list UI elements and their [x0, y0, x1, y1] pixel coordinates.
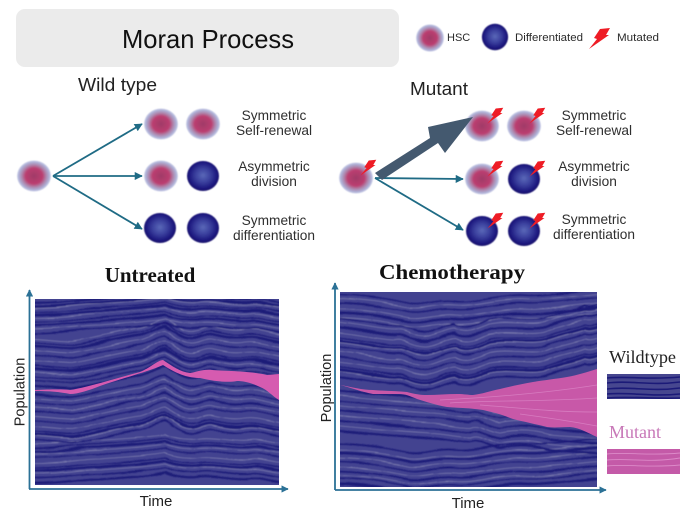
legend: cell types: Mutated	[617, 32, 659, 44]
mutant diagram	[339, 108, 635, 246]
labels: wild type	[233, 108, 315, 243]
big arrow: favoured self-renewal	[375, 117, 473, 180]
legend: cell types: HSC	[447, 32, 470, 44]
legend: wildtype	[607, 347, 680, 399]
arrows: mutant divisions	[375, 178, 463, 230]
labels: mutant: differentiation	[553, 227, 635, 242]
labels: wild type: Symmetric	[242, 108, 306, 123]
axis label: time: Time	[452, 495, 484, 512]
bolts: mutation marks	[360, 108, 545, 228]
labels: mutant: division	[571, 174, 617, 189]
labels: wild type: Self-renewal	[236, 123, 312, 138]
labels: mutant: Self-renewal	[556, 123, 632, 138]
axis label: time: Time	[140, 493, 172, 510]
arrows: wild type divisions	[53, 124, 142, 229]
mutant clone band: untreated	[35, 360, 279, 400]
axis label: population: Population	[319, 354, 335, 422]
labels: wild type: Symmetric	[242, 213, 306, 228]
legend: mutant: Mutant	[609, 422, 661, 442]
legend: mutant	[607, 422, 680, 474]
title banner	[16, 9, 399, 67]
heading: untreated: Untreated	[105, 263, 196, 287]
chart: untreated muller plot	[35, 299, 279, 485]
axes: chemotherapy	[335, 283, 606, 490]
cells: wild type	[17, 108, 220, 243]
heading: chemotherapy: Chemotherapy	[379, 260, 526, 284]
legend: cell types: Differentiated	[515, 32, 583, 44]
labels: mutant: Asymmetric	[558, 159, 630, 174]
legend: cell types	[416, 24, 659, 52]
chart: chemotherapy muller plot	[340, 292, 597, 487]
axis label: population: Population	[12, 358, 28, 426]
labels: wild type: division	[251, 174, 297, 189]
heading: mutant: Mutant	[410, 78, 468, 99]
title: Moran Process	[122, 24, 294, 54]
mutant clone band: chemotherapy	[340, 369, 597, 437]
labels: wild type: Asymmetric	[238, 159, 310, 174]
labels: wild type: differentiation	[233, 228, 315, 243]
labels: mutant: Symmetric	[562, 212, 626, 227]
legend: wildtype: Wildtype	[609, 347, 676, 367]
wild type diagram	[17, 108, 315, 243]
heading: wild type: Wild type	[78, 74, 157, 95]
axes: untreated	[29, 290, 288, 489]
labels: mutant	[553, 108, 635, 242]
cells: mutant	[339, 110, 541, 246]
labels: mutant: Symmetric	[562, 108, 626, 123]
